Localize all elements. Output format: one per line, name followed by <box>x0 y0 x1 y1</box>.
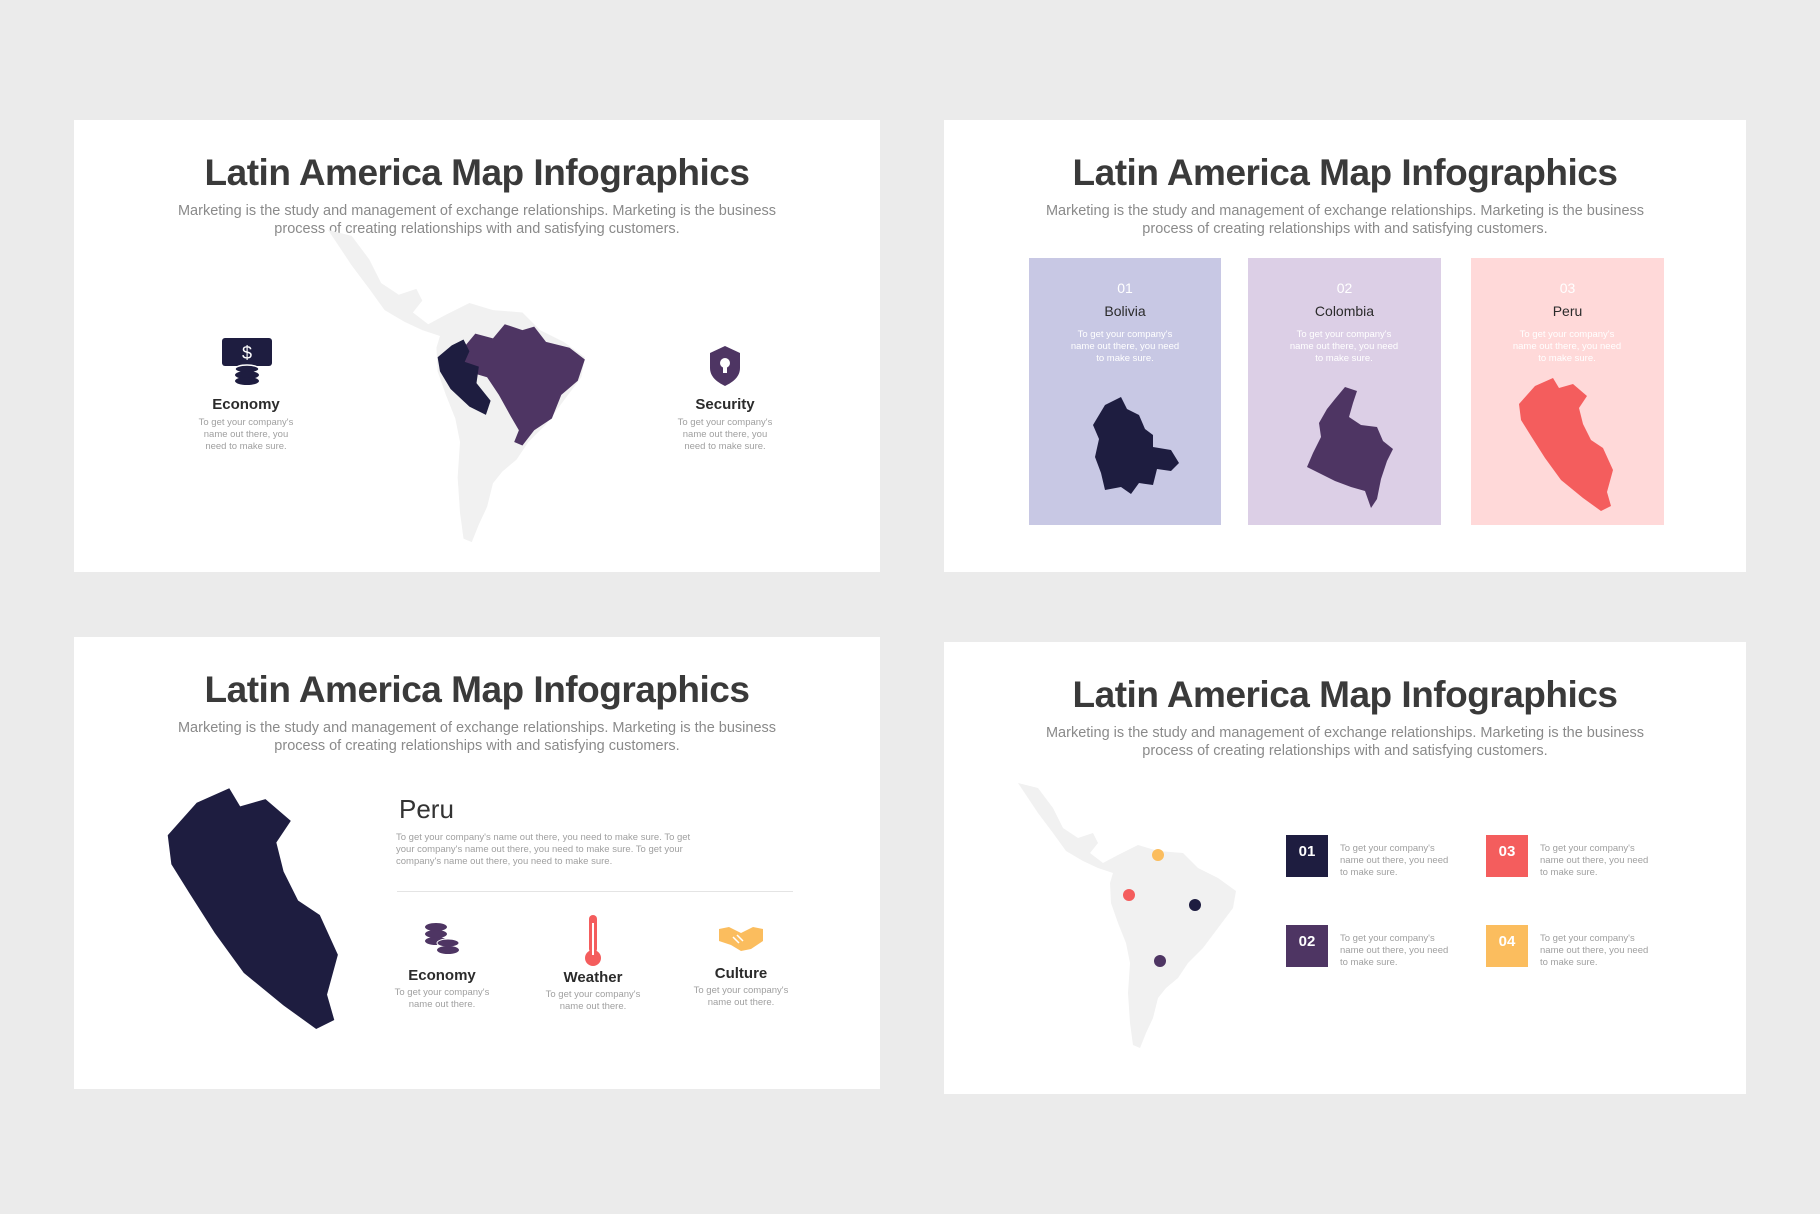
title: Latin America Map Infographics <box>1073 152 1617 193</box>
item: weather: Weather <box>564 969 622 986</box>
item 02: To get your company's name out there, you need to make sure. <box>1340 933 1448 968</box>
text: economy: To get your company's name out there, you need to make sure. <box>199 417 293 452</box>
paragraph: To get your company's name out there, you need to make sure. To get your company's name out there, you need to make sure. To get your company's name out there, you need to make sure. <box>396 832 690 867</box>
text: economy <box>198 396 293 452</box>
item 03: To get your company's name out there, you need to make sure. <box>1540 843 1648 878</box>
item: economy: Economy <box>408 967 476 984</box>
item: culture: Culture <box>715 965 767 982</box>
item: weather: To get your company's name out there. <box>546 989 640 1012</box>
subtitle <box>1046 203 1644 237</box>
card: peru: To get your company's name out there, you need to make sure. <box>1513 329 1621 364</box>
card: bolivia: 01 <box>1117 280 1133 296</box>
heading: peru: Peru <box>399 794 454 824</box>
subtitle: Marketing is the study and management of exchange relationships. Marketing is the business <box>178 720 776 736</box>
item 01 <box>1286 835 1448 878</box>
text: economy: Economy <box>212 396 280 413</box>
title: Latin America Map Infographics <box>1073 674 1617 715</box>
item 04: 04 <box>1499 933 1515 950</box>
panel: three country cards <box>944 120 1746 572</box>
item 01: 01 <box>1299 843 1315 860</box>
item: culture: To get your company's name out there. <box>694 985 788 1008</box>
subtitle: Marketing is the study and management of exchange relationships. Marketing is the business <box>178 203 776 219</box>
title: Latin America Map Infographics <box>205 669 749 710</box>
item: economy <box>394 923 489 1010</box>
card: bolivia: To get your company's name out there, you need to make sure. <box>1071 329 1179 364</box>
item 03: 03 <box>1499 843 1515 860</box>
card: colombia <box>1248 258 1441 525</box>
text: security: To get your company's name out there, you need to make sure. <box>678 417 772 452</box>
card: colombia: 02 <box>1337 280 1352 296</box>
card: colombia: Colombia <box>1315 303 1374 319</box>
subtitle: process of creating relationships with and satisfying customers. <box>1142 743 1548 759</box>
card: bolivia <box>1029 258 1221 525</box>
icon: thermometer <box>585 915 601 966</box>
subtitle: process of creating relationships with and satisfying customers. <box>274 738 680 754</box>
subtitle: process of creating relationships with and satisfying customers. <box>274 221 680 237</box>
icon: shield <box>710 346 740 386</box>
item 03 <box>1486 835 1648 878</box>
card: peru: 03 <box>1560 280 1575 296</box>
map: peru <box>1519 378 1613 511</box>
title: Latin America Map Infographics <box>205 152 749 193</box>
map: colombia <box>1307 387 1393 508</box>
item: weather <box>546 915 640 1012</box>
icon: handshake <box>719 927 763 951</box>
item 04: To get your company's name out there, you need to make sure. <box>1540 933 1648 968</box>
subtitle: Marketing is the study and management of exchange relationships. Marketing is the business <box>1046 203 1644 219</box>
panel: map with numbered points <box>944 642 1746 1094</box>
subtitle: process of creating relationships with and satisfying customers. <box>1142 221 1548 237</box>
map: peru large <box>168 788 338 1029</box>
item: culture <box>694 927 788 1008</box>
item 02 <box>1286 925 1448 968</box>
item 01: To get your company's name out there, you need to make sure. <box>1340 843 1448 878</box>
text: security: Security <box>695 396 755 413</box>
panel: map with economy and security <box>74 120 880 572</box>
subtitle: Marketing is the study and management of exchange relationships. Marketing is the business <box>1046 725 1644 741</box>
panel: peru detail <box>74 637 880 1089</box>
map: latin america with dots <box>1018 783 1236 1048</box>
card: bolivia: Bolivia <box>1104 303 1146 319</box>
subtitle <box>178 203 776 237</box>
map: bolivia <box>1093 397 1179 494</box>
text: security <box>678 396 772 452</box>
item 02: 02 <box>1299 933 1315 950</box>
card: colombia: To get your company's name out there, you need to make sure. <box>1290 329 1398 364</box>
subtitle <box>1046 725 1644 759</box>
map: latin america with brazil and peru <box>328 230 585 542</box>
card: peru: Peru <box>1553 303 1582 319</box>
item 04 <box>1486 925 1648 968</box>
icon: coins <box>425 923 459 954</box>
subtitle <box>178 720 776 754</box>
icon: money: $ <box>242 343 252 363</box>
icon: money <box>222 338 272 385</box>
card: peru <box>1471 258 1664 525</box>
item: economy: To get your company's name out there. <box>395 987 489 1010</box>
